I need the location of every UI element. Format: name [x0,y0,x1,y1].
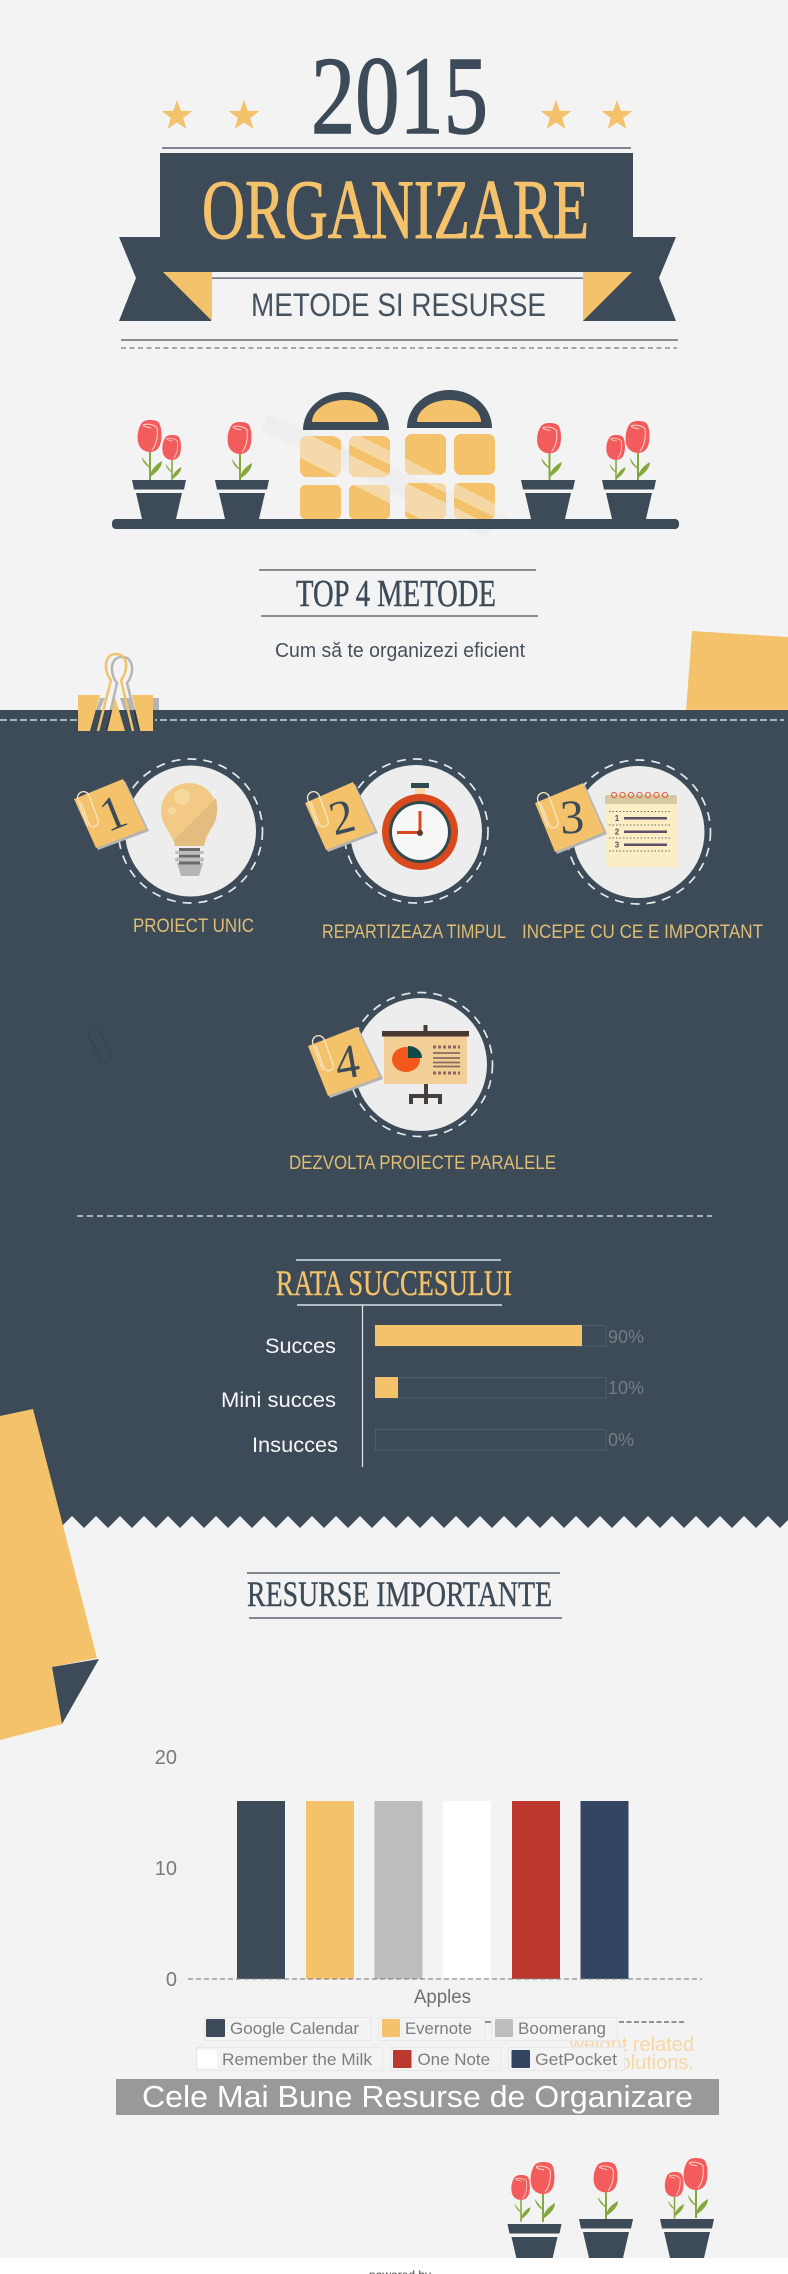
legend: boomerang [492,2018,618,2040]
method 2: stopwatch [305,759,506,943]
legend: evernote [378,2018,484,2040]
legend: one note [390,2048,500,2070]
success rate bar chart [221,1305,644,1467]
flower pot 1 [132,420,186,519]
sticky note 4 [308,1027,383,1098]
pane reflections [300,436,495,519]
row: insucces [252,1430,634,1457]
faint paperclip [86,1027,113,1065]
row: succes: 90% [608,1327,644,1347]
heading: resurse importante: RESURSE IMPORTANTE [247,1574,552,1614]
icon: notepad: 3 [615,840,620,850]
window glare [261,415,508,537]
heading: rata succesului: RATA SUCCESULUI [276,1263,512,1303]
legend: one note: One Note [418,2050,490,2069]
legend: remember the milk [196,2048,382,2070]
y axis labels: 10 [155,1858,177,1880]
faint background text: solutions. [610,2052,694,2074]
binder clip icon [78,654,159,731]
label: INCEPE CU CE E IMPORTANT [522,922,763,943]
year 2015: 2015 [311,35,488,158]
resources bar chart [155,1747,702,2008]
legend: remember the milk: Remember the Milk [222,2050,373,2069]
label: REPARTIZEAZA TIMPUL [322,922,506,943]
icon: notepad [605,792,677,867]
sticky note 1: 1 [92,784,134,843]
x axis label: Apples [414,1987,471,2008]
bottom flower pots [508,2158,714,2263]
window right [405,390,495,519]
title ribbon banner [119,147,676,323]
sticky note 1 [74,779,149,850]
icon: light bulb [161,783,217,876]
row: succes: Succes [265,1335,336,1358]
legend: google calendar [204,2018,372,2040]
sticky note 3 [535,783,607,854]
sticky note 3: 3 [559,790,585,845]
faint background text: weight related [568,2034,694,2056]
legend: boomerang: Boomerang [518,2019,606,2038]
flower pot 4 [602,421,656,519]
flower pot A [508,2162,562,2263]
icon: presentation board [382,1025,469,1104]
grey caption banner: Cele Mai Bune Resurse de Organizare [142,2080,693,2114]
footer strip [0,2258,788,2274]
window left [300,392,390,519]
shelf [112,519,679,529]
subtitle: METODE SI RESURSE [251,287,546,323]
row: mini succes: Mini succes [221,1389,336,1412]
sticky note 4: 4 [331,1034,364,1091]
chart legend [196,2018,624,2070]
icon: notepad: 2 [615,828,620,836]
method 4: presentation [289,992,556,1174]
sticky note 2 [305,782,378,852]
title divider lines [121,339,678,348]
y axis labels: 0 [166,1969,177,1991]
label: PROIECT UNIC [133,916,254,937]
row: mini succes: 10% [608,1378,644,1398]
flower pot B [579,2162,633,2258]
method 3: notepad [522,760,763,943]
legend: getpocket: GetPocket [535,2050,617,2069]
flower pot 3 [521,423,575,519]
icon: stopwatch [382,783,458,870]
row: succes [265,1325,644,1358]
shelf scene with windows and flowers [112,390,679,529]
legend: google calendar: Google Calendar [230,2019,359,2038]
method 1: bulb [74,759,262,937]
legend: evernote: Evernote [405,2019,472,2038]
icon: notepad: 1 [615,814,620,823]
sticky note 2: 2 [324,789,361,846]
flower pot 2 [215,422,269,519]
heading: top 4 metode: TOP 4 METODE [296,573,496,615]
flower pot C [660,2158,714,2258]
subheading text: Cum să te organizezi eficient [275,640,525,662]
y axis labels [155,1747,177,1991]
yellow folded note left [0,1409,99,1740]
label: DEZVOLTA PROIECTE PARALELE [289,1153,556,1174]
heading: ORGANIZARE: ORGANIZARE [202,163,589,257]
row: mini succes [221,1377,644,1412]
row: insucces: Insucces [252,1434,338,1457]
yellow paper top right [686,631,788,711]
small dashes behind legend [485,2021,686,2023]
legend: getpocket [508,2048,624,2070]
row: insucces: 0% [608,1430,634,1450]
panel divider [77,1215,712,1217]
y axis labels: 20 [155,1747,177,1769]
bars [237,1801,628,1979]
faint background text [568,2034,694,2074]
dark panel [0,710,788,1528]
stars [162,100,632,129]
